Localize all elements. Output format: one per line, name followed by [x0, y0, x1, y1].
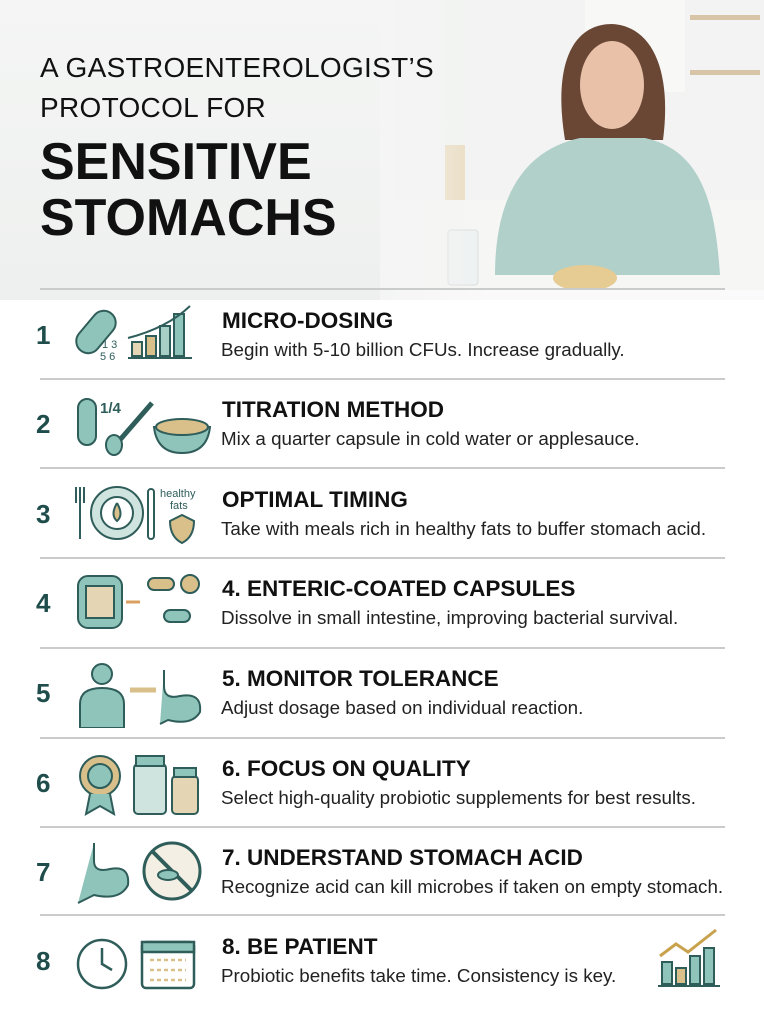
- header panel with photo: [0, 0, 764, 300]
- step 8: 8. BE PATIENT: [222, 934, 377, 959]
- step 6: 6. FOCUS ON QUALITY: [222, 756, 471, 781]
- icon: badge and bottles: [79, 755, 199, 816]
- step 3: Take with meals rich in healthy fats to buffer stomach acid.: [221, 518, 706, 539]
- title: A GASTROENTEROLOGIST’S: [40, 52, 434, 83]
- title: SENSITIVE: [40, 133, 312, 191]
- icon: clock and calendar: [76, 938, 196, 990]
- step 6: [36, 755, 696, 816]
- icon: capsule spoon bowl: [77, 398, 212, 456]
- step 5: 5: [36, 678, 50, 708]
- step 4: Dissolve in small intestine, improving bacterial survival.: [221, 607, 678, 628]
- step 2: TITRATION METHOD: [222, 397, 444, 422]
- step 5: Adjust dosage based on individual reaction.: [221, 697, 583, 718]
- step 8: Probiotic benefits take time. Consistency is key.: [221, 965, 616, 986]
- step 7: 7: [36, 857, 50, 887]
- step 3: [36, 486, 706, 544]
- step 2: 2: [36, 409, 50, 439]
- title: STOMACHS: [40, 189, 337, 247]
- step 7: 7. UNDERSTAND STOMACH ACID: [222, 845, 583, 870]
- icon: stomach and no-bacteria: [78, 842, 202, 904]
- step 4: 4. ENTERIC-COATED CAPSULES: [222, 576, 575, 601]
- step 3: 3: [36, 499, 50, 529]
- step 1: 1: [36, 320, 50, 350]
- step 5: 5. MONITOR TOLERANCE: [222, 666, 499, 691]
- icon: capsule and chart: 5 6: [100, 351, 115, 363]
- step 6: Select high-quality probiotic supplements for best results.: [221, 787, 696, 808]
- step 8: [36, 928, 720, 990]
- step 7: Recognize acid can kill microbes if taken on empty stomach.: [221, 876, 723, 897]
- step 4: 4: [36, 588, 50, 618]
- step 8: 8: [36, 946, 50, 976]
- icon: capsule and chart: 1 3: [102, 339, 117, 351]
- icon: plate and fats: healthy: [160, 488, 196, 500]
- icon: growth chart: [658, 928, 720, 987]
- step 1: MICRO-DOSING: [222, 308, 393, 333]
- title: [40, 52, 434, 247]
- step 7: [36, 842, 723, 904]
- photo: woman in kitchen: [426, 15, 764, 300]
- step 5: [36, 663, 583, 728]
- icon: plate and fats: fats: [170, 500, 188, 512]
- step 2: Mix a quarter capsule in cold water or applesauce.: [221, 428, 640, 449]
- step 1: Begin with 5-10 billion CFUs. Increase gradually.: [221, 339, 625, 360]
- icon: intestine and capsules: [77, 574, 200, 629]
- step 4: [36, 574, 678, 629]
- step 1: [36, 305, 625, 363]
- title: PROTOCOL FOR: [40, 92, 266, 123]
- icon: capsule and chart: [75, 305, 192, 363]
- icon: capsule spoon bowl: 1/4: [100, 400, 122, 417]
- step 6: 6: [36, 768, 50, 798]
- icon: person arrow stomach: [79, 663, 202, 728]
- step 3: OPTIMAL TIMING: [222, 487, 408, 512]
- icon: plate and fats: [75, 486, 196, 544]
- step 2: [36, 397, 640, 456]
